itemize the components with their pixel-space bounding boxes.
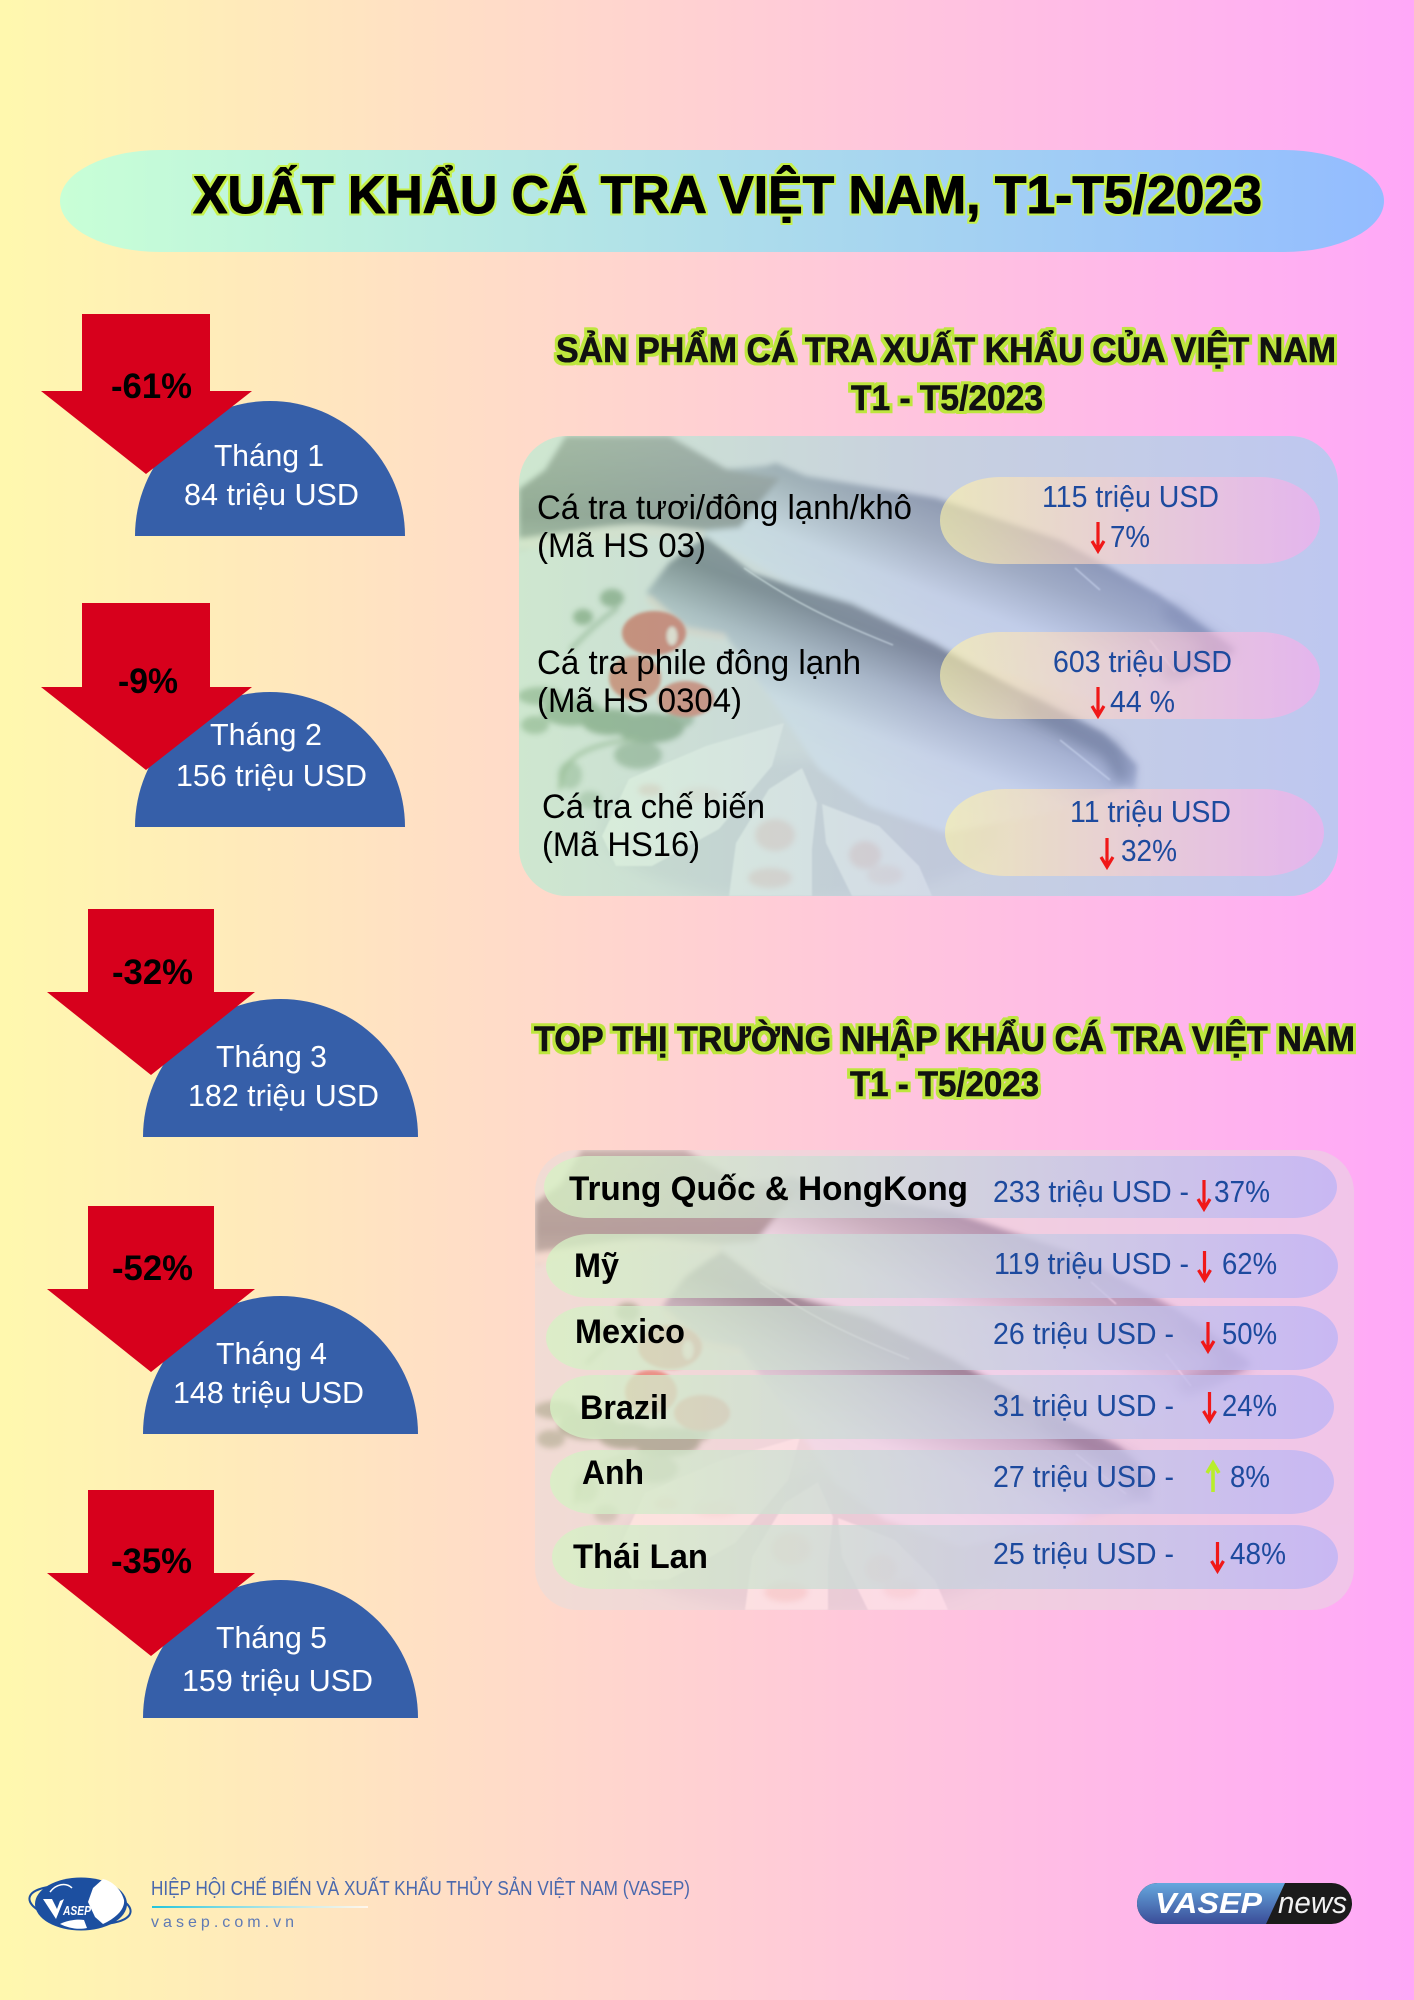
product row: frozen fillet: Cá tra phile đông lạnh (537, 644, 861, 682)
product row: processed: 11 triệu USD (1070, 795, 1231, 829)
month 3 card: 182 triệu USD (188, 1078, 379, 1113)
market row: Thailand (552, 1525, 1338, 1589)
market row: USA: 119 triệu USD - (994, 1247, 1189, 1281)
heading: products: SẢN PHẨM CÁ TRA XUẤT KHẨU CỦA VIỆT NAM (556, 330, 1336, 370)
month 4 card (47, 1206, 418, 1434)
market row: Brazil (550, 1375, 1334, 1439)
footer: VASEP news logo: VASEP (1155, 1888, 1263, 1920)
heading: top markets: TOP THỊ TRƯỜNG NHẬP KHẨU CÁ TRA VIỆT NAM (534, 1019, 1355, 1059)
fish photo panel background (518, 436, 1338, 900)
month 3 card: -32% (112, 953, 193, 992)
heading: products (556, 330, 1336, 418)
month 5 card (47, 1490, 418, 1718)
month 1 card: -61% (111, 367, 192, 406)
market row: USA: Mỹ (574, 1247, 619, 1285)
month 5 card: 159 triệu USD (182, 1663, 373, 1698)
heading: top markets (534, 1019, 1355, 1104)
market row: UK: 8% (1230, 1460, 1270, 1494)
market row: China and Hong Kong: 37% (1214, 1175, 1270, 1209)
product row: frozen fillet: 44 % (1110, 685, 1175, 719)
product row: processed (542, 788, 1324, 876)
month 2 card: -9% (118, 662, 178, 701)
product row: processed: (Mã HS16) (542, 826, 700, 864)
footer: organisation text: vasep.com.vn (151, 1914, 294, 1931)
panel: top markets (534, 1150, 1354, 1614)
market row: China and Hong Kong: 233 triệu USD - (993, 1175, 1189, 1209)
month 2 card: 156 triệu USD (176, 758, 367, 793)
title banner (60, 150, 1384, 252)
market row: Mexico: 26 triệu USD - (993, 1317, 1174, 1351)
month 4 card: Tháng 4 (216, 1336, 327, 1371)
footer: VASEP news logo (1137, 1883, 1352, 1924)
market row: Brazil: Brazil (580, 1389, 668, 1427)
product row: fresh frozen dried: 115 triệu USD (1042, 480, 1219, 514)
title banner: XUẤT KHẨU CÁ TRA VIỆT NAM, T1-T5/2023 (193, 164, 1262, 225)
panel: products (518, 436, 1338, 900)
month 2 card: Tháng 2 (210, 717, 322, 752)
product row: fresh frozen dried: 7% (1110, 520, 1150, 554)
month 3 card: Tháng 3 (216, 1039, 327, 1074)
month 1 card: 84 triệu USD (184, 477, 359, 512)
month 1 card: Tháng 1 (214, 438, 324, 473)
market row: USA (546, 1234, 1338, 1298)
market row: Thailand: Thái Lan (573, 1538, 708, 1576)
market row: Thailand: 48% (1230, 1537, 1286, 1571)
month 4 card: 148 triệu USD (173, 1375, 364, 1410)
market row: China and Hong Kong: Trung Quốc & HongKong (569, 1170, 968, 1208)
product row: frozen fillet: 603 triệu USD (1053, 645, 1232, 679)
market row: Brazil: 24% (1222, 1389, 1277, 1423)
product row: frozen fillet (537, 632, 1320, 720)
product row: processed: 32% (1121, 834, 1177, 868)
footer: VASEP logo (27, 1878, 133, 1930)
product row: processed: Cá tra chế biến (542, 788, 765, 826)
month 3 card (47, 909, 418, 1137)
market row: Mexico: Mexico (575, 1313, 685, 1351)
footer: organisation text (151, 1876, 690, 1931)
month 5 card: Tháng 5 (216, 1620, 327, 1655)
footer: VASEP news logo: news (1278, 1885, 1347, 1920)
market row: Brazil: 31 triệu USD - (993, 1389, 1174, 1423)
heading: top markets: T1 - T5/2023 (850, 1065, 1039, 1104)
month 4 card: -52% (112, 1249, 193, 1288)
market row: Mexico: 50% (1222, 1317, 1277, 1351)
market row: Thailand: 25 triệu USD - (993, 1537, 1174, 1571)
footer: VASEP logo: ASEP (62, 1903, 91, 1918)
market row: China and Hong Kong (544, 1156, 1337, 1218)
market row: UK: Anh (582, 1454, 644, 1492)
product row: fresh frozen dried: Cá tra tươi/đông lạnh/khô (537, 489, 912, 527)
month 2 card (41, 603, 405, 827)
product row: frozen fillet: (Mã HS 0304) (537, 682, 742, 720)
market row: Mexico (546, 1306, 1338, 1370)
heading: products: T1 - T5/2023 (851, 379, 1043, 418)
footer: organisation text: HIỆP HỘI CHẾ BIẾN VÀ XUẤT KHẨU THỦY SẢN VIỆT NAM (VASEP) (151, 1876, 690, 1900)
market row: UK (550, 1450, 1334, 1514)
fish photo panel background (534, 1150, 1354, 1614)
month 5 card: -35% (111, 1542, 192, 1581)
product row: fresh frozen dried (537, 477, 1320, 565)
market row: USA: 62% (1222, 1247, 1277, 1281)
product row: fresh frozen dried: (Mã HS 03) (537, 527, 706, 565)
month 1 card (41, 314, 405, 536)
market row: UK: 27 triệu USD - (993, 1460, 1174, 1494)
